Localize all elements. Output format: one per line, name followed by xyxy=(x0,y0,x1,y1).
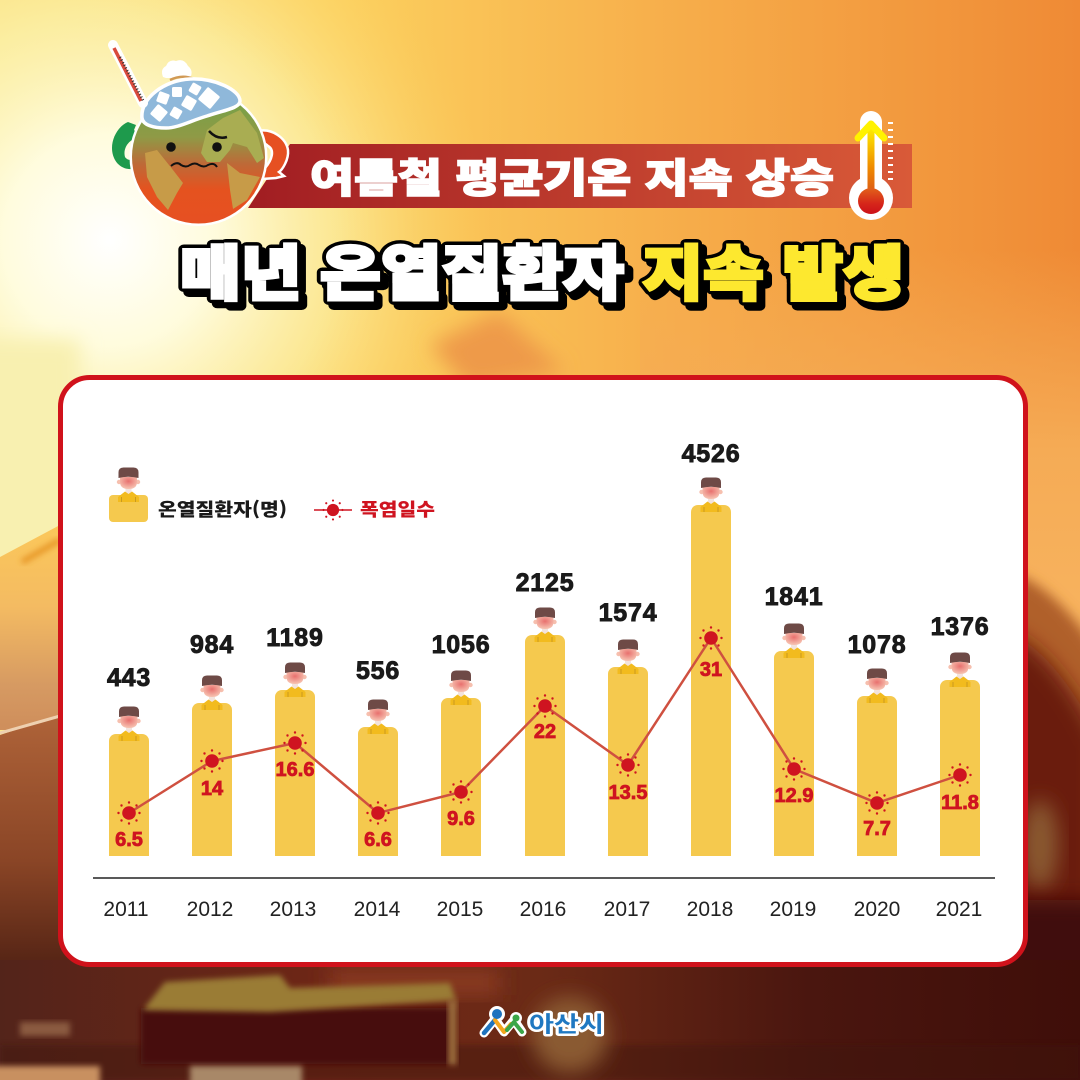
subtitle ribbon xyxy=(248,144,912,208)
heat wave day values xyxy=(115,659,979,851)
logo: Asan city: 아산시 xyxy=(529,1007,604,1039)
patient count values: 984 xyxy=(190,631,234,659)
patient count values: 1056 xyxy=(432,631,490,659)
x axis: 2020 xyxy=(854,898,900,921)
heat wave day values: 16.6 xyxy=(276,759,314,781)
patient count values: 1189 xyxy=(266,624,324,652)
x axis: 2012 xyxy=(187,898,233,921)
icon: sick earth character xyxy=(112,45,288,226)
x axis xyxy=(93,878,995,921)
patient count values: 1376 xyxy=(931,613,989,641)
patient count values: 4526 xyxy=(682,440,740,468)
patient count values: 556 xyxy=(356,657,400,685)
line chart: heat wave days xyxy=(117,626,972,825)
thermometer in head xyxy=(113,45,144,103)
x axis: 2011 xyxy=(103,898,149,921)
logo: Asan city xyxy=(484,1006,604,1039)
face xyxy=(166,131,227,167)
x axis: 2017 xyxy=(604,898,650,921)
heat wave day values: 12.9 xyxy=(775,785,813,807)
icons: patient figures xyxy=(117,478,972,741)
x axis: 2014 xyxy=(354,898,401,921)
patient count values: 1841 xyxy=(765,583,823,611)
x axis: 2021 xyxy=(936,898,982,921)
panel: chart card xyxy=(60,378,1026,964)
legend: 폭염일수 xyxy=(360,496,435,522)
x axis: 2016 xyxy=(520,898,566,921)
heat wave day values: 13.5 xyxy=(609,782,647,804)
bar chart: heat illness patients xyxy=(109,505,980,856)
heat wave day values: 9.6 xyxy=(447,808,475,830)
patient count values: 1078 xyxy=(848,631,906,659)
legend: 온열질환자(명) xyxy=(158,496,287,522)
title: 매년 온열질환자 지속 발생 xyxy=(180,226,904,313)
legend xyxy=(109,468,435,522)
heat wave day values: 14 xyxy=(201,778,224,800)
x axis: 2019 xyxy=(770,898,816,921)
icon: thermometer xyxy=(849,111,893,220)
heat wave day values: 7.7 xyxy=(863,818,891,840)
title: 매년 온열질환자 지속 발생 xyxy=(185,231,909,318)
heat wave day values: 22 xyxy=(534,721,556,743)
patient count values xyxy=(107,440,989,692)
heat wave day values: 11.8 xyxy=(941,792,979,814)
heat wave day values: 31 xyxy=(700,659,722,681)
ice pack xyxy=(142,60,240,128)
subtitle text: 여름철 평균기온 지속 상승 xyxy=(310,146,834,204)
patient count values: 2125 xyxy=(516,569,574,597)
x axis: 2018 xyxy=(687,898,733,921)
patient count values: 1574 xyxy=(599,599,657,627)
heat wave day values: 6.5 xyxy=(115,829,143,851)
patient count values: 443 xyxy=(107,664,151,692)
heat wave day values: 6.6 xyxy=(364,829,392,851)
x axis: 2013 xyxy=(270,898,316,921)
title: 매년 온열질환자 지속 발생 xyxy=(180,226,904,313)
x axis: 2015 xyxy=(437,898,483,921)
